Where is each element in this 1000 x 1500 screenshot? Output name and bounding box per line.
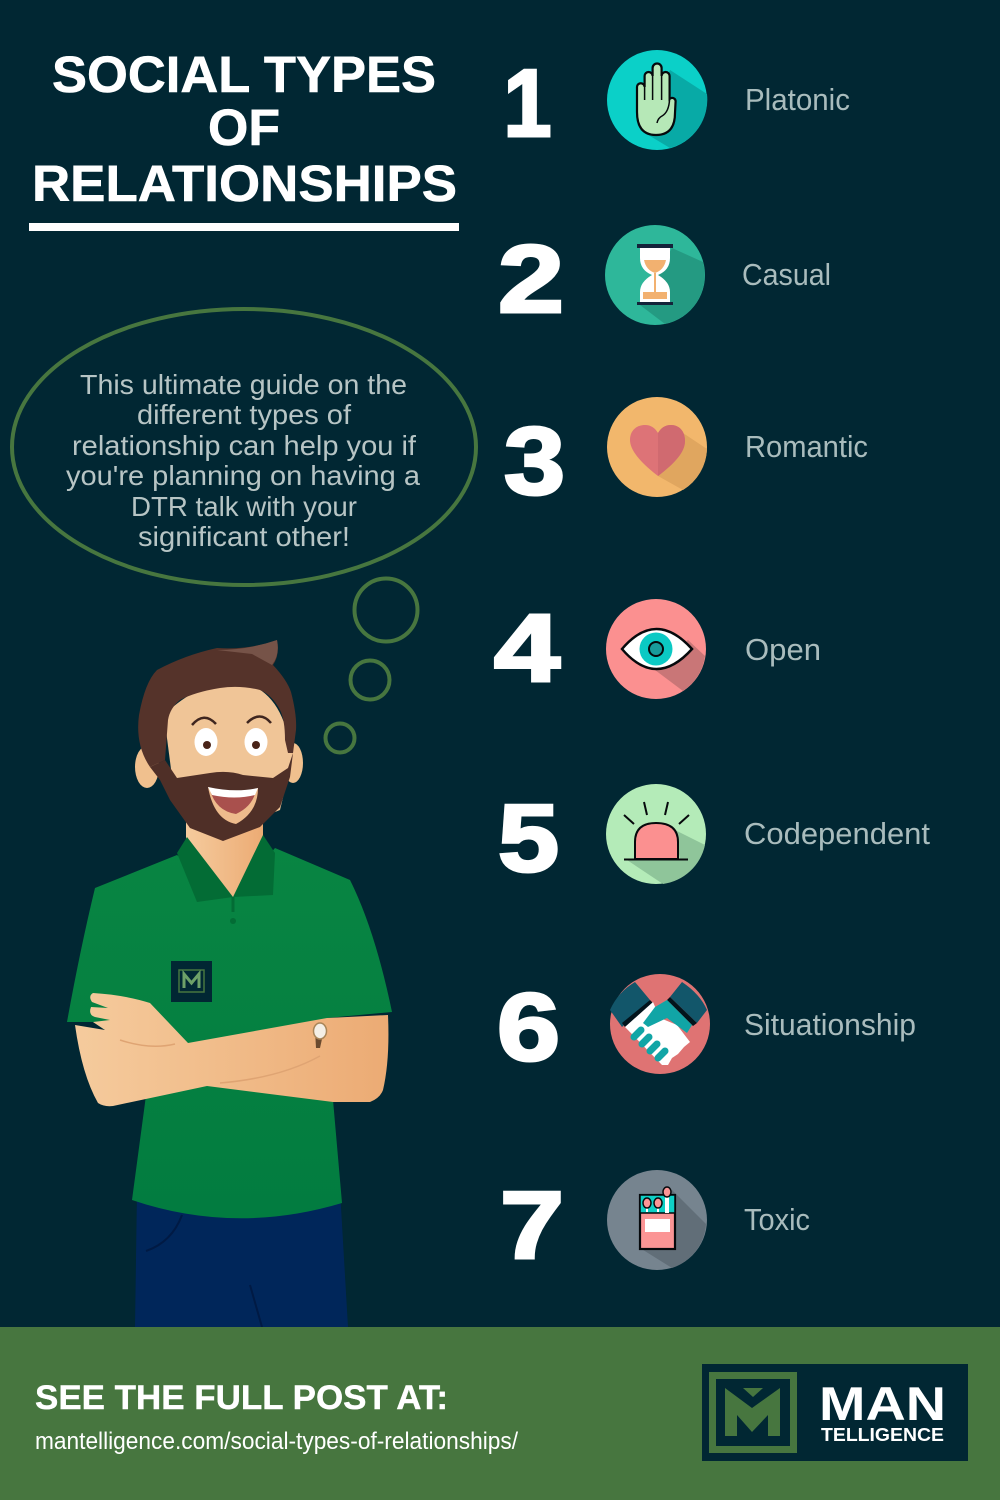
- thought bubble: DTR talk with your: [131, 491, 357, 522]
- number 6: 6: [497, 974, 560, 1081]
- ears: [135, 746, 159, 788]
- face: [164, 682, 292, 830]
- icon: eye: [606, 599, 706, 699]
- icon: alarm: [606, 784, 706, 884]
- logo: [702, 1364, 968, 1461]
- icon: heart: [607, 397, 707, 497]
- label: Toxic: Toxic: [744, 1202, 810, 1237]
- logo: MAN: [819, 1377, 946, 1430]
- thought bubble: you're planning on having a: [66, 460, 420, 491]
- footer heading: SEE THE FULL POST AT:: [35, 1379, 448, 1417]
- crossed arms: [75, 993, 388, 1106]
- beard: [150, 753, 293, 841]
- label: Situationship: Situationship: [744, 1007, 916, 1042]
- thought bubble: This ultimate guide on the: [80, 369, 407, 400]
- logo: TELLIGENCE: [821, 1425, 944, 1445]
- wristwatch: [314, 1023, 326, 1048]
- number 1: 1: [504, 50, 552, 157]
- hair: [138, 640, 296, 767]
- number 7: 7: [500, 1172, 564, 1279]
- number 2: 2: [498, 226, 564, 333]
- title: SOCIAL TYPES: [52, 46, 436, 103]
- title: OF: [208, 99, 280, 156]
- number 4: 4: [494, 595, 560, 702]
- number 5: 5: [498, 785, 559, 892]
- thought bubble: [12, 309, 476, 752]
- thought bubble: different types of: [137, 399, 351, 430]
- shirt: [67, 848, 392, 1218]
- thought bubble: relationship can help you if: [72, 430, 416, 461]
- illustration: man with crossed arms: [67, 640, 392, 1327]
- label: Romantic: Romantic: [745, 429, 868, 464]
- label: Casual: Casual: [742, 257, 831, 292]
- label: Codependent: Codependent: [744, 816, 930, 851]
- shirt logo patch: [171, 961, 212, 1002]
- thought bubble: significant other!: [138, 521, 350, 552]
- neck: [186, 820, 263, 900]
- title: RELATIONSHIPS: [32, 155, 457, 212]
- collar: [177, 835, 275, 924]
- icon: handshake: [610, 974, 710, 1074]
- icon: hourglass: [605, 225, 705, 325]
- number 3: 3: [504, 408, 565, 515]
- icon: hand: [607, 50, 707, 150]
- title: [29, 46, 459, 231]
- label: Platonic: Platonic: [745, 82, 850, 117]
- footer url: mantelligence.com/social-types-of-relationships/: [35, 1428, 518, 1455]
- icon: matches: [607, 1170, 707, 1270]
- label: Open: Open: [745, 632, 821, 667]
- mouth: [208, 787, 258, 824]
- trousers: [135, 1190, 348, 1327]
- footer band: [0, 1327, 1000, 1500]
- eyes: [194, 728, 218, 756]
